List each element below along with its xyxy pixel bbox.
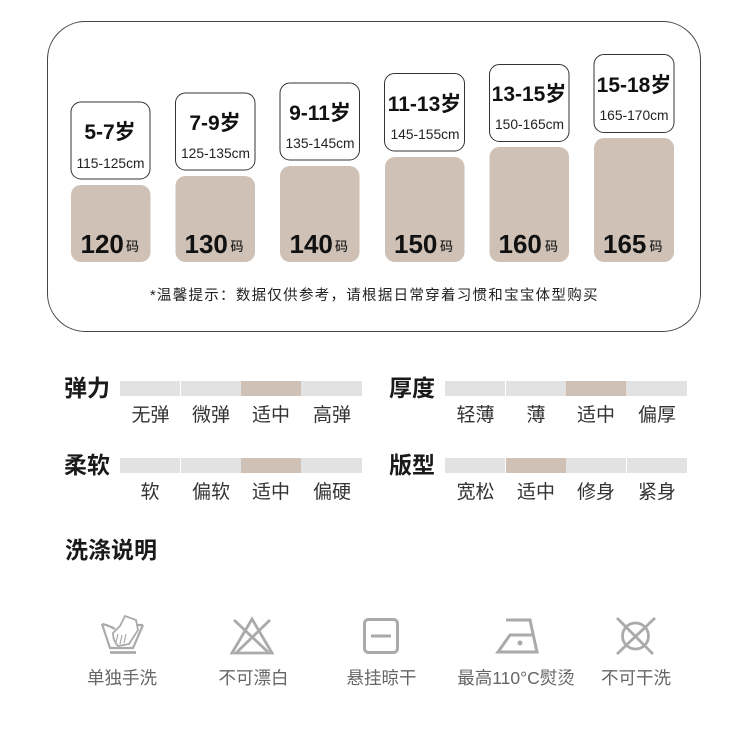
rating: 弹力: 适中 <box>252 404 290 426</box>
size column: 160 <box>490 64 569 262</box>
size column: 130: 7-9岁 <box>189 112 241 135</box>
size column: 130: 码 <box>230 239 244 254</box>
rating: 弹力: 高弹 <box>313 404 351 426</box>
size column: 140: 135-145cm <box>285 136 355 151</box>
rating: 柔软: 适中 <box>252 481 290 503</box>
size column: 120 <box>71 102 150 262</box>
size column: 165: 165-170cm <box>599 108 669 123</box>
rating: 弹力: 无弹 <box>131 404 170 426</box>
rating: 版型: 适中 <box>517 481 555 503</box>
size column: 160: 150-165cm <box>495 117 564 132</box>
size column: 120: 115-125cm <box>76 156 145 171</box>
rating: 版型: 宽松 <box>456 481 495 503</box>
wash item: iron at 110°C <box>457 620 575 688</box>
size column: 120: 码 <box>126 239 139 254</box>
rating: 版型: 修身 <box>577 481 615 503</box>
size column: 130 <box>176 93 255 262</box>
rating: 柔软: 偏软 <box>192 481 230 503</box>
wash item: line dry: 悬挂晾干 <box>346 668 416 688</box>
rating: 柔软: 柔软 <box>64 452 110 478</box>
size column: 150: 11-13岁 <box>388 93 461 116</box>
rating: 厚度: 薄 <box>526 404 546 426</box>
rating: 柔软: 偏硬 <box>313 481 351 503</box>
rating: 柔软: 软 <box>140 481 160 503</box>
rating: 版型 <box>389 452 687 503</box>
size column: 130: 125-135cm <box>181 146 250 161</box>
size column: 120: 120 <box>80 229 124 259</box>
icon: crossed triangle <box>232 619 272 653</box>
size column: 150: 145-155cm <box>390 127 460 142</box>
rating: 弹力: 微弹 <box>192 404 230 426</box>
size column: 150: 150 <box>394 229 437 259</box>
wash item: line dry <box>346 620 416 688</box>
rating: 厚度 <box>389 375 687 426</box>
rating: 弹力: 弹力 <box>64 375 110 401</box>
size column: 160: 13-15岁 <box>492 83 566 106</box>
rating: 弹力 <box>64 375 362 426</box>
rating: 版型: 版型 <box>389 452 435 478</box>
size column: 165: 165 <box>603 229 646 259</box>
size column: 140: 9-11岁 <box>289 102 351 125</box>
rating: 柔软 <box>64 452 362 503</box>
wash item: no bleach <box>218 619 288 688</box>
wash item: no dry clean: 不可干洗 <box>601 668 671 688</box>
icon: hand wash basin <box>102 616 143 652</box>
size column: 150: 码 <box>440 239 453 254</box>
size column: 120: 5-7岁 <box>84 121 136 144</box>
panel: size chart <box>48 22 700 332</box>
size column: 130: 130 <box>184 229 228 259</box>
size column: 165 <box>594 54 674 262</box>
wash item: iron at 110°C: 最高110°C熨烫 <box>457 668 575 688</box>
heading: wash instructions: 洗涤说明 <box>65 537 157 563</box>
rating: 厚度: 偏厚 <box>638 404 676 426</box>
size column: 140: 140 <box>290 229 333 259</box>
size column: 140: 码 <box>335 239 348 254</box>
rating: 厚度: 适中 <box>577 404 615 426</box>
icon: crossed circle <box>617 618 655 654</box>
rating: 厚度: 轻薄 <box>456 404 495 426</box>
size column: 140 <box>280 83 360 262</box>
wash item: no dry clean <box>601 618 671 688</box>
size column: 165: 码 <box>650 239 663 254</box>
size column: 160: 码 <box>545 239 558 254</box>
size column: 150 <box>384 74 464 262</box>
size column: 165: 15-18岁 <box>597 74 671 97</box>
icon: iron <box>498 620 537 652</box>
rating: 版型: 紧身 <box>638 481 676 503</box>
icon: square with line <box>364 620 398 652</box>
size column: 160: 160 <box>498 229 542 259</box>
rating: 厚度: 厚度 <box>389 375 435 401</box>
wash item: hand wash <box>87 616 157 688</box>
size tip note: *温馨提示：数据仅供参考，请根据日常穿着习惯和宝宝体型购买 <box>150 287 599 304</box>
wash item: hand wash: 单独手洗 <box>87 668 157 688</box>
wash item: no bleach: 不可漂白 <box>218 668 288 688</box>
